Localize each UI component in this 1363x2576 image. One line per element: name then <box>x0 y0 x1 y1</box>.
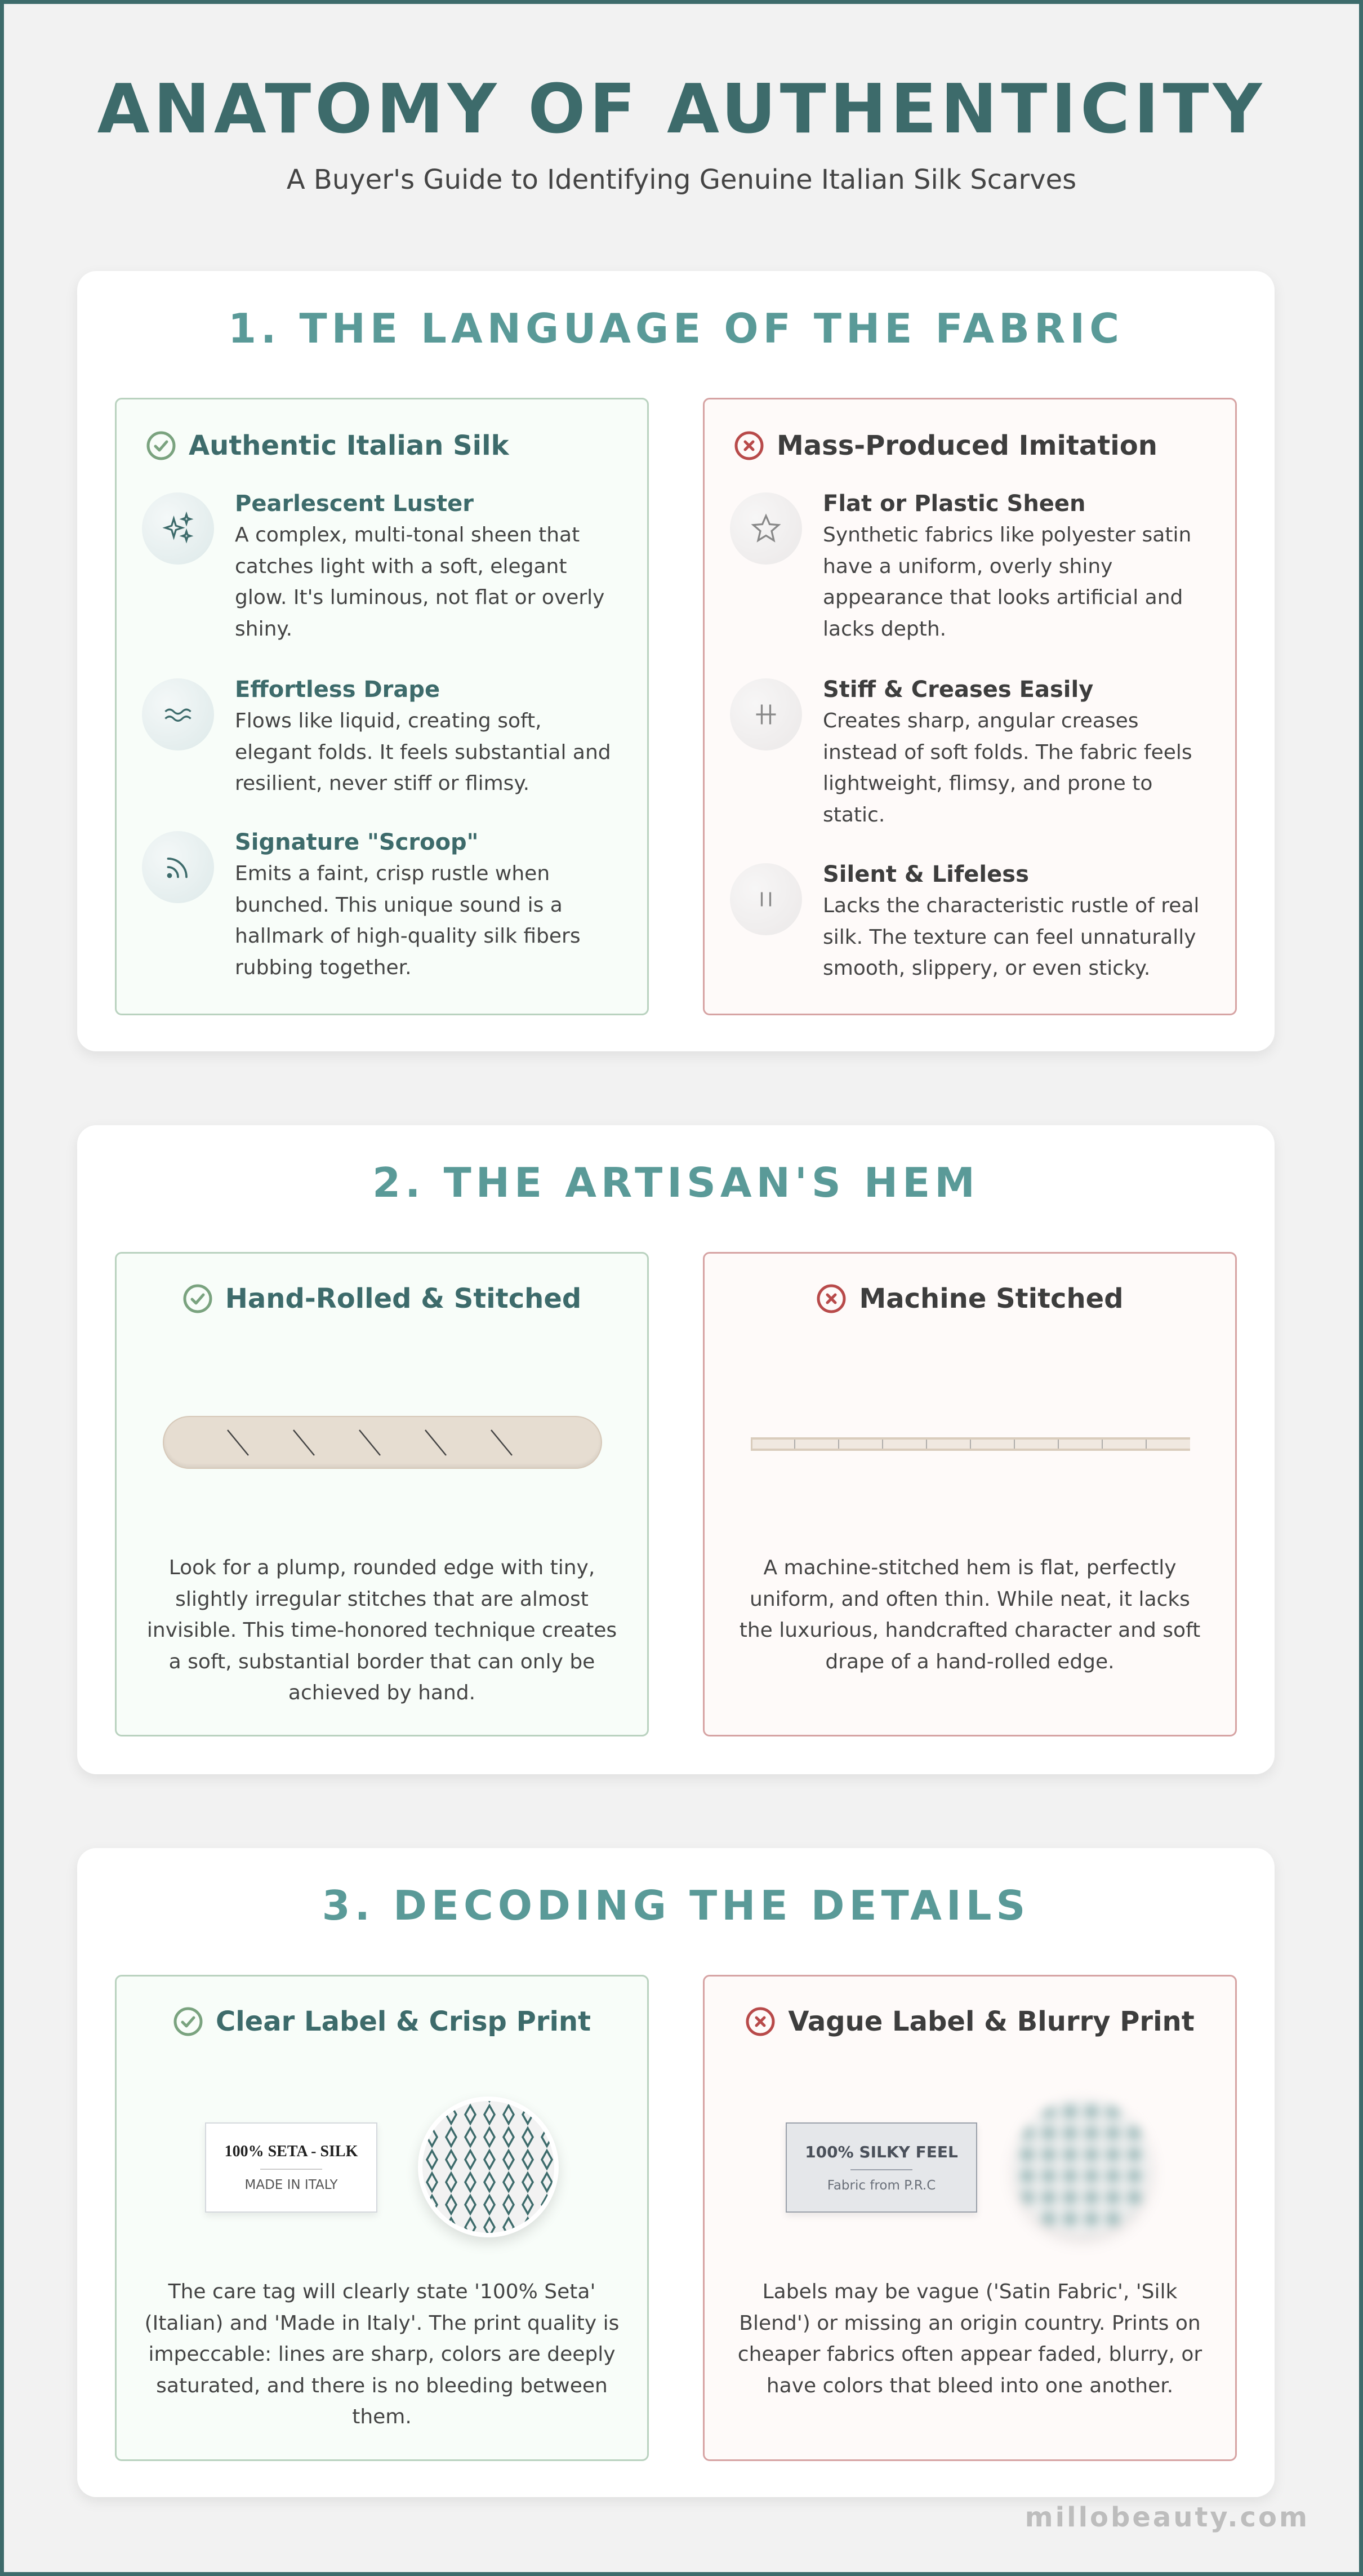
text: clear label description <box>145 2280 619 2428</box>
text: machine description: the luxurious, handcrafted character and soft <box>740 1619 1200 1642</box>
text: hand-rolled description: invisible. This time-honored technique creates <box>147 1619 617 1642</box>
text: hand-rolled description: achieved by hand. <box>288 1681 475 1704</box>
panel: authentic silk: catches light with a soft, elegant <box>235 554 567 578</box>
panel: imitation: Lacks the characteristic rustle of real <box>823 894 1199 917</box>
panel: authentic silk: Flows like liquid, creating soft, <box>235 709 542 732</box>
panel: authentic silk: elegant folds. It feels substantial and <box>235 740 611 764</box>
panel: authentic silk: bunched. This unique sound is a <box>235 894 563 916</box>
panel: section 2 hem <box>77 1125 1275 1774</box>
panel: authentic silk <box>115 398 649 1015</box>
icon: silent bars <box>730 863 802 935</box>
icon: waves <box>142 678 214 750</box>
panel: imitation: smooth, slippery, or even sticky. <box>823 957 1150 980</box>
panel: imitation: Creates sharp, angular creases <box>823 709 1139 732</box>
item: signature scroop <box>142 829 581 979</box>
panel: imitation: lightweight, flimsy, and prone to <box>823 772 1152 795</box>
panel: imitation <box>703 398 1237 1015</box>
panel: authentic silk: resilient, never stiff or flimsy. <box>235 772 529 795</box>
illustration: rolled hem <box>163 1416 602 1469</box>
text: clear label description: them. <box>352 2405 412 2428</box>
text: vague label description: cheaper fabrics often appear faded, blurry, or <box>738 2343 1202 2366</box>
illustration: care tag: MADE IN ITALY <box>244 2178 338 2192</box>
panel: section 3 details <box>77 1848 1275 2497</box>
icon: sparkles <box>142 492 214 565</box>
illustration: vague tag: 100% SILKY FEEL <box>805 2143 958 2161</box>
panel: section 1 fabric <box>77 271 1275 1051</box>
illustration: care tag <box>205 2122 377 2213</box>
panel: authentic silk: Pearlescent Luster <box>235 491 474 517</box>
illustration: blurry print swatch <box>1015 2099 1150 2235</box>
item: silent lifeless <box>730 861 1199 980</box>
panel: machine stitched <box>703 1252 1237 1736</box>
panel: imitation: Silent & Lifeless <box>823 861 1029 887</box>
header: clear label: Clear Label & Crisp Print <box>216 2006 591 2037</box>
text: hand-rolled description <box>147 1556 617 1704</box>
text: hand-rolled description: Look for a plump, rounded edge with tiny, <box>169 1556 595 1579</box>
text: machine description <box>740 1556 1200 1673</box>
panel: authentic silk: Emits a faint, crisp rustle when <box>235 862 550 885</box>
panel: vague label <box>703 1975 1237 2461</box>
text: vague label description: Blend') or missing an origin country. Prints on <box>739 2311 1201 2335</box>
illustration: care tag: 100% SETA - SILK <box>225 2143 358 2160</box>
panel: authentic silk: glow. It's luminous, not flat or overly <box>235 586 604 609</box>
header: machine: Machine Stitched <box>859 1283 1124 1314</box>
text: clear label description: saturated, and there is no bleeding between <box>156 2374 608 2397</box>
panel: imitation: static. <box>823 803 885 826</box>
heading: section 1: 1. THE LANGUAGE OF THE FABRIC <box>228 305 1124 352</box>
text: machine description: uniform, and often thin. While neat, it lacks <box>750 1588 1190 1610</box>
text: vague label description <box>738 2280 1202 2397</box>
text: clear label description: (Italian) and 'Made in Italy'. The print quality is <box>145 2311 619 2335</box>
panel: imitation: have a uniform, overly shiny <box>823 554 1112 578</box>
item: stiff creases <box>730 677 1192 826</box>
panel: imitation: Flat or Plastic Sheen <box>823 491 1086 517</box>
icon: star outline <box>730 492 802 565</box>
item: pearlescent luster <box>142 491 604 640</box>
panel: authentic silk: Signature "Scroop" <box>235 829 479 855</box>
text: machine description: A machine-stitched hem is flat, perfectly <box>763 1556 1177 1579</box>
panel: imitation: Synthetic fabrics like polyester satin <box>823 523 1191 547</box>
panel: authentic silk: hallmark of high-quality silk fibers <box>235 925 581 948</box>
icon: sound waves <box>142 831 214 903</box>
text: clear label description: impeccable: lines are sharp, colors are deeply <box>148 2343 616 2366</box>
header: vague label: Vague Label & Blurry Print <box>788 2006 1195 2037</box>
text: vague label description: have colors that bleed into one another. <box>767 2374 1173 2397</box>
panel: clear label <box>115 1975 649 2461</box>
illustration: crisp print swatch <box>418 2097 559 2237</box>
heading: section 3: 3. DECODING THE DETAILS <box>322 1882 1030 1929</box>
panel: imitation: lacks depth. <box>823 618 946 640</box>
header: authentic: Authentic Italian Silk <box>189 430 509 461</box>
illustration: vague tag <box>786 2122 977 2213</box>
icon: crease lines <box>730 678 802 750</box>
panel: imitation: Stiff & Creases Easily <box>823 677 1093 703</box>
text: vague label description: Labels may be vague ('Satin Fabric', 'Silk <box>763 2280 1177 2303</box>
subtitle: A Buyer's Guide to Identifying Genuine Italian Silk Scarves <box>287 164 1076 196</box>
header: imitation: Mass-Produced Imitation <box>777 430 1157 461</box>
item: flat sheen <box>730 491 1191 640</box>
panel: authentic silk: Effortless Drape <box>235 677 440 703</box>
text: machine description: drape of a hand-rolled edge. <box>825 1650 1115 1673</box>
item: effortless drape <box>142 677 611 795</box>
panel: imitation: silk. The texture can feel unnaturally <box>823 925 1196 949</box>
illustration: vague tag: Fabric from P.R.C <box>827 2178 936 2193</box>
panel: imitation: appearance that looks artificial and <box>823 586 1183 609</box>
footer: website: millobeauty.com <box>1025 2502 1309 2533</box>
illustration: flat hem <box>751 1437 1190 1451</box>
panel: imitation: instead of soft folds. The fabric feels <box>823 740 1192 764</box>
text: hand-rolled description: slightly irregular stitches that are almost <box>175 1588 589 1610</box>
title: ANATOMY OF AUTHENTICITY <box>97 70 1266 149</box>
panel: authentic silk: rubbing together. <box>235 956 412 979</box>
header: hand-rolled: Hand-Rolled & Stitched <box>225 1283 581 1314</box>
panel: authentic silk: shiny. <box>235 618 292 640</box>
text: hand-rolled description: a soft, substantial border that can only be <box>169 1650 595 1673</box>
panel: hand-rolled <box>115 1252 649 1736</box>
panel: authentic silk: A complex, multi-tonal sheen that <box>235 523 580 547</box>
text: clear label description: The care tag will clearly state '100% Seta' <box>168 2280 595 2303</box>
heading: section 2: 2. THE ARTISAN'S HEM <box>372 1159 979 1206</box>
